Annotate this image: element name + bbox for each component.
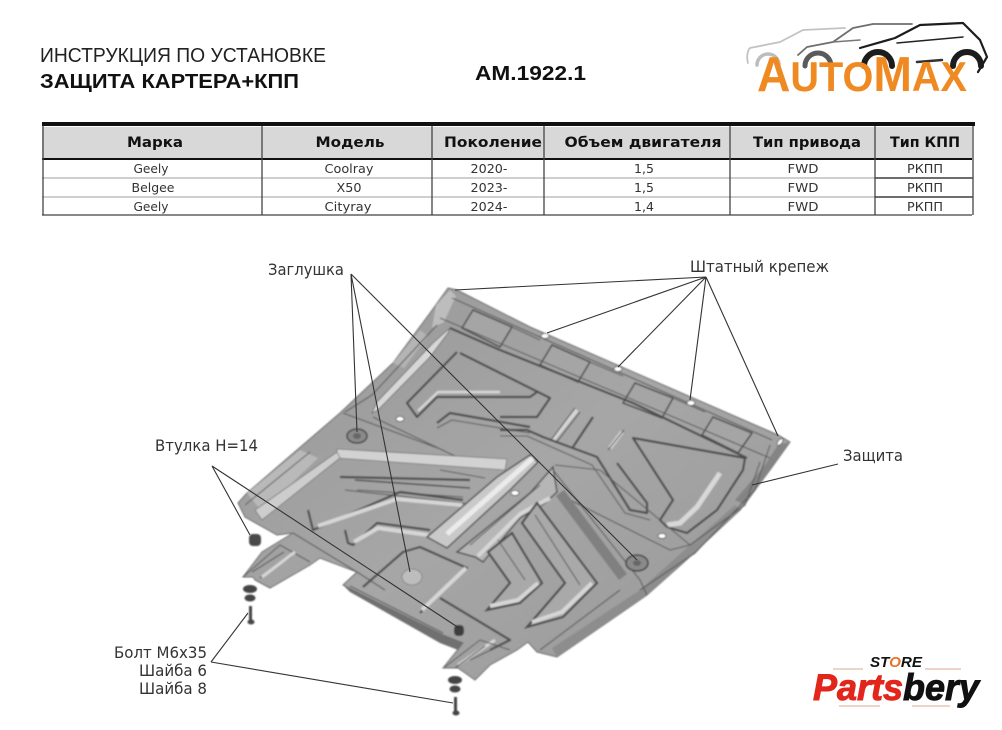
title: installation instruction: ИНСТРУКЦИЯ ПО УСТАНОВКЕ: [40, 45, 326, 67]
upper pockets: [407, 352, 537, 417]
label: hardware list: [114, 643, 207, 698]
central raised bars: [427, 455, 690, 650]
plugs: [347, 429, 648, 571]
label: Штатный крепеж: Штатный крепеж: [690, 257, 829, 276]
leader lines: [211, 274, 838, 703]
table row: Geely Coolray: Coolray: [324, 161, 374, 176]
table row: Belgee X50: [132, 180, 943, 195]
lower pocket: [363, 547, 467, 613]
table row: Geely Cityray: FWD: [788, 199, 818, 214]
table header: [127, 135, 960, 151]
store label: STORE: [870, 654, 923, 671]
table: vehicle compatibility: [42, 122, 975, 216]
table row: Geely Coolray: Geely: [134, 161, 169, 176]
label: hardware list: Шайба 6: [139, 661, 207, 680]
table row: Geely Coolray: 2020-: [470, 161, 508, 176]
table row: Geely Cityray: Geely: [134, 199, 169, 214]
sleeves: [249, 534, 464, 636]
table row: Geely Cityray: Cityray: [324, 199, 372, 214]
table header: Тип КПП: [890, 135, 960, 151]
left bands: [255, 452, 340, 520]
table row: Geely Coolray: [134, 161, 943, 176]
washers and bolts: [243, 585, 462, 716]
right pocket: [633, 438, 745, 533]
table row: Belgee X50: 2023-: [470, 180, 508, 195]
table header: Поколение: [444, 135, 542, 151]
label: Защита: Защита: [843, 446, 903, 465]
table header: Объем двигателя: [564, 135, 722, 151]
label: hardware list: Болт М6х35: [114, 643, 207, 662]
table row: Geely Cityray: 1,4: [634, 199, 654, 214]
middle long lines: [343, 413, 457, 457]
table row: Geely Cityray: [134, 199, 943, 214]
mounting holes: [396, 334, 784, 538]
skid plate drawing: [238, 288, 790, 716]
left ear: [243, 545, 310, 578]
table header: Марка: [127, 135, 183, 151]
edge bevels: [247, 290, 790, 657]
title: installation instruction: [40, 45, 326, 93]
highlight at plug: [402, 569, 422, 585]
label: Заглушка: Заглушка: [268, 260, 344, 279]
right ear: [458, 640, 495, 665]
icon: three car silhouettes: [747, 23, 987, 72]
table header: Тип привода: [753, 135, 861, 151]
decorative rules: [833, 669, 961, 706]
table row: Geely Cityray: 2024-: [470, 199, 508, 214]
article number: AM.1922.1: [475, 63, 586, 85]
logo: AutoMax: [747, 23, 987, 102]
table header: Модель: [316, 135, 385, 151]
table row: Geely Coolray: РКПП: [907, 161, 943, 176]
left upper light strip: [372, 328, 450, 413]
wordmark: AUTOMAX: [757, 48, 967, 102]
table row: Belgee X50: 1,5: [634, 180, 654, 195]
label: hardware list: Шайба 8: [139, 679, 207, 698]
table row: Belgee X50: X50: [336, 180, 362, 195]
table row: Geely Coolray: FWD: [788, 161, 818, 176]
table row: Geely Cityray: РКПП: [907, 199, 943, 214]
label: Втулка: Втулка Н=14: [155, 436, 258, 455]
plate outline: [238, 288, 790, 680]
title: installation instruction: ЗАЩИТА КАРТЕРА+КПП: [40, 71, 299, 93]
table row: Belgee X50: Belgee: [132, 180, 175, 195]
table row: Geely Coolray: 1,5: [634, 161, 654, 176]
wordmark: Partsbery: [813, 667, 981, 708]
stamped ribs: [243, 298, 772, 668]
table row: Belgee X50: FWD: [788, 180, 818, 195]
tabs along front edge: [462, 310, 752, 453]
logo: Partsbery store: [813, 654, 981, 708]
table row: Belgee X50: РКПП: [907, 180, 943, 195]
